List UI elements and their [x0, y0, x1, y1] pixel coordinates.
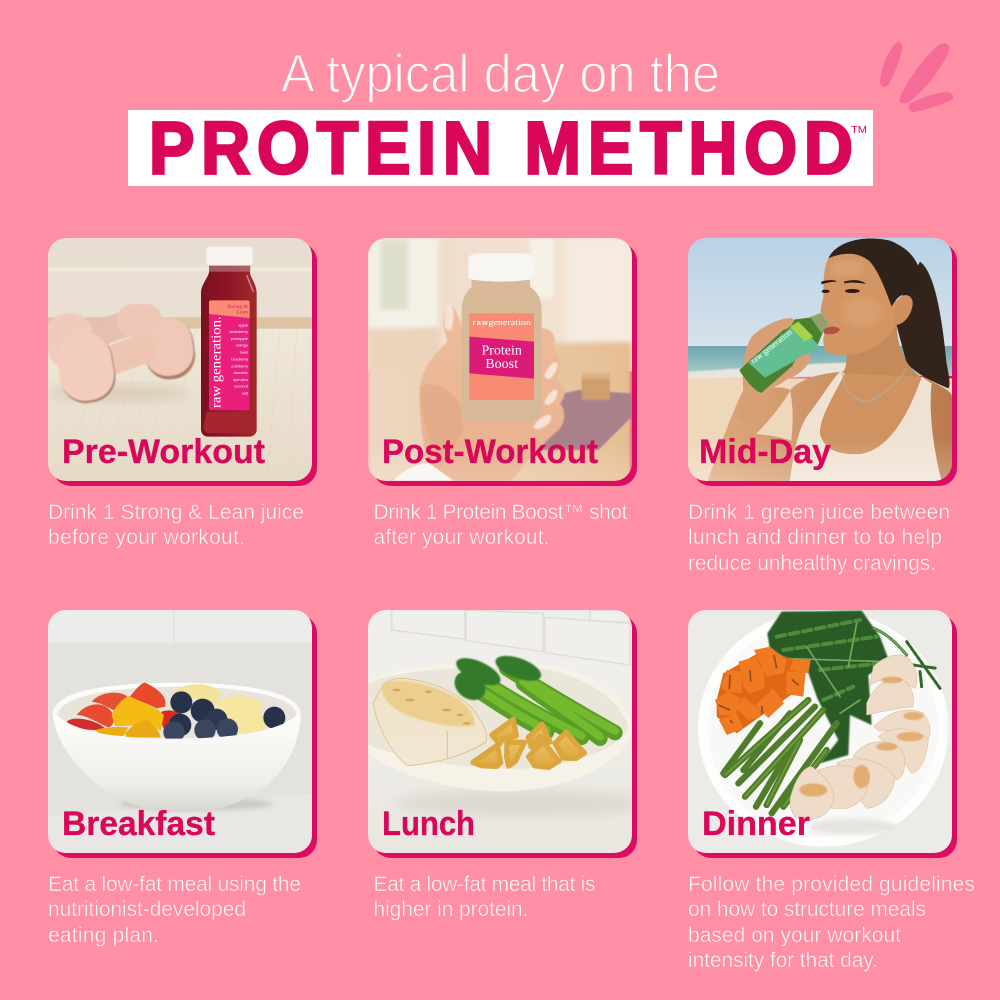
bowl front rim cover	[52, 714, 284, 743]
bowl inside	[57, 687, 297, 738]
arugula	[767, 611, 940, 763]
text block: breakfast: nutritionist-developed	[48, 898, 246, 921]
text block: dinner: based on your workout	[688, 924, 901, 947]
text block: lunch: higher in protein.	[374, 898, 528, 921]
front dumbbell	[58, 318, 196, 404]
photo: hand holding protein shot: Boost	[485, 357, 518, 372]
card shadow	[53, 243, 317, 486]
protein shot bottle	[462, 280, 542, 422]
panel: mid-day	[688, 238, 957, 486]
text block: mid-day: reduce unhealthy cravings.	[688, 552, 936, 575]
eyes and brows	[821, 280, 866, 293]
photo: dumbbells and red juice bottle: pineapple	[231, 336, 249, 341]
text block: lunch: Eat a low-fat meal that is	[374, 873, 596, 896]
photo: woman drinking green juice on beach	[688, 238, 952, 485]
label: Lunch: Lunch	[382, 805, 475, 843]
text block: lunch	[374, 873, 596, 921]
panel: dinner	[688, 610, 957, 858]
text block: dinner: intensity for that day.	[688, 949, 878, 972]
photo: dumbbells and red juice bottle: raw generation.	[208, 316, 223, 408]
photo: dumbbells and red juice bottle: salt	[242, 391, 249, 396]
photo: hand holding protein shot: Protein	[481, 343, 522, 358]
text block: dinner	[688, 873, 975, 972]
label: Mid-Day: Mid-Day	[699, 433, 831, 471]
wall tiles	[392, 607, 633, 665]
card shadow	[53, 615, 317, 858]
plate	[698, 610, 949, 847]
text block: post-workout: Drink 1 Protein Boost™ shot	[374, 501, 628, 524]
face	[821, 250, 902, 355]
photo: dumbbells and red juice bottle: spirulina	[233, 377, 249, 382]
hand	[419, 304, 565, 483]
green bottle: raw generation	[748, 327, 794, 366]
photo: dumbbells and red juice bottle	[43, 238, 312, 482]
photo: dumbbells and red juice bottle: Lean	[237, 310, 248, 316]
panel: pre-workout	[43, 238, 317, 486]
yoga mat	[540, 390, 632, 450]
sweater cuff	[393, 463, 453, 481]
text block: pre-workout: Drink 1 Strong & Lean juice	[48, 501, 304, 524]
label: Dinner: Dinner	[702, 805, 810, 843]
photo: hand holding protein shot: raw	[473, 318, 488, 327]
text block: post-workout	[374, 501, 628, 549]
text block: breakfast: Eat a low-fat meal using the	[48, 873, 301, 896]
photo: dumbbells and red juice bottle: cranberry	[231, 363, 248, 368]
card shadow	[693, 615, 957, 858]
blueberries	[163, 691, 285, 743]
text block: mid-day: Drink 1 green juice between	[688, 501, 950, 524]
green bottle	[739, 313, 829, 393]
photo: hand holding protein shot	[368, 238, 632, 483]
heading banner: PROTEIN METHOD: TM	[851, 125, 867, 136]
panel: breakfast	[48, 610, 317, 858]
label: Pre-Workout: Pre-Workout	[62, 433, 265, 471]
text block: breakfast: eating plan.	[48, 924, 159, 947]
text block: mid-day: lunch and dinner to to help	[688, 526, 942, 549]
asparagus	[463, 667, 615, 738]
fingers over bottle	[788, 355, 811, 378]
hand and arm	[742, 318, 810, 390]
ear	[893, 295, 913, 325]
card shadow	[373, 615, 637, 858]
photo: dumbbells and red juice bottle: beet	[240, 350, 249, 355]
mango	[112, 696, 164, 731]
panel: lunch	[368, 607, 647, 858]
photo: dumbbells and red juice bottle: coconut	[234, 384, 249, 389]
title: A typical day on the: A typical day on the	[281, 44, 720, 104]
hair top	[828, 238, 922, 307]
tank top	[789, 372, 942, 483]
bowl	[52, 682, 300, 738]
text block: mid-day	[688, 501, 950, 575]
torso	[707, 372, 952, 483]
text block: pre-workout	[48, 501, 304, 549]
card shadow	[693, 243, 957, 486]
potatoes	[473, 719, 584, 767]
text block: post-workout: after your workout.	[374, 526, 550, 549]
panel: post-workout	[368, 238, 637, 486]
ponytail and hair	[893, 262, 950, 388]
red juice bottle	[201, 266, 257, 437]
text block: dinner: Follow the provided guidelines	[688, 873, 975, 896]
heading banner: PROTEIN METHOD: PROTEIN METHOD	[149, 108, 853, 190]
photo: fish, asparagus and potatoes plate	[368, 607, 647, 853]
bananas	[171, 684, 222, 707]
photo: chicken, greens and carrots plate	[688, 610, 952, 853]
label: Breakfast: Breakfast	[62, 805, 215, 843]
chicken slices	[790, 655, 930, 819]
carrots	[717, 650, 807, 733]
photo: dumbbells and red juice bottle: orange	[236, 343, 249, 348]
chest skin	[820, 373, 922, 454]
plate	[368, 743, 626, 792]
neck	[843, 325, 920, 376]
back dumbbell	[48, 304, 162, 366]
photo: fruit bowl	[48, 610, 313, 853]
text block: pre-workout: before your workout.	[48, 526, 245, 549]
text block: dinner: on how to structure meals	[688, 898, 926, 921]
icon: accent strokes	[880, 42, 953, 112]
photo: dumbbells and red juice bottle: turmeric	[234, 370, 248, 375]
yoga block	[582, 373, 610, 400]
photo: dumbbells and red juice bottle: Strong &	[227, 304, 249, 310]
necklace	[843, 368, 907, 402]
text block: breakfast	[48, 873, 301, 947]
photo: hand holding protein shot: generation	[488, 318, 532, 327]
card shadow	[373, 243, 637, 486]
strawberries	[67, 683, 191, 732]
green beans	[723, 700, 837, 813]
photo: dumbbells and red juice bottle: apple	[238, 322, 249, 327]
label: Post-Workout: Post-Workout	[382, 433, 598, 471]
photo: dumbbells and red juice bottle: strawberry	[229, 329, 248, 334]
photo: dumbbells and red juice bottle: blueberry	[231, 356, 248, 361]
fish fillet	[373, 678, 487, 766]
